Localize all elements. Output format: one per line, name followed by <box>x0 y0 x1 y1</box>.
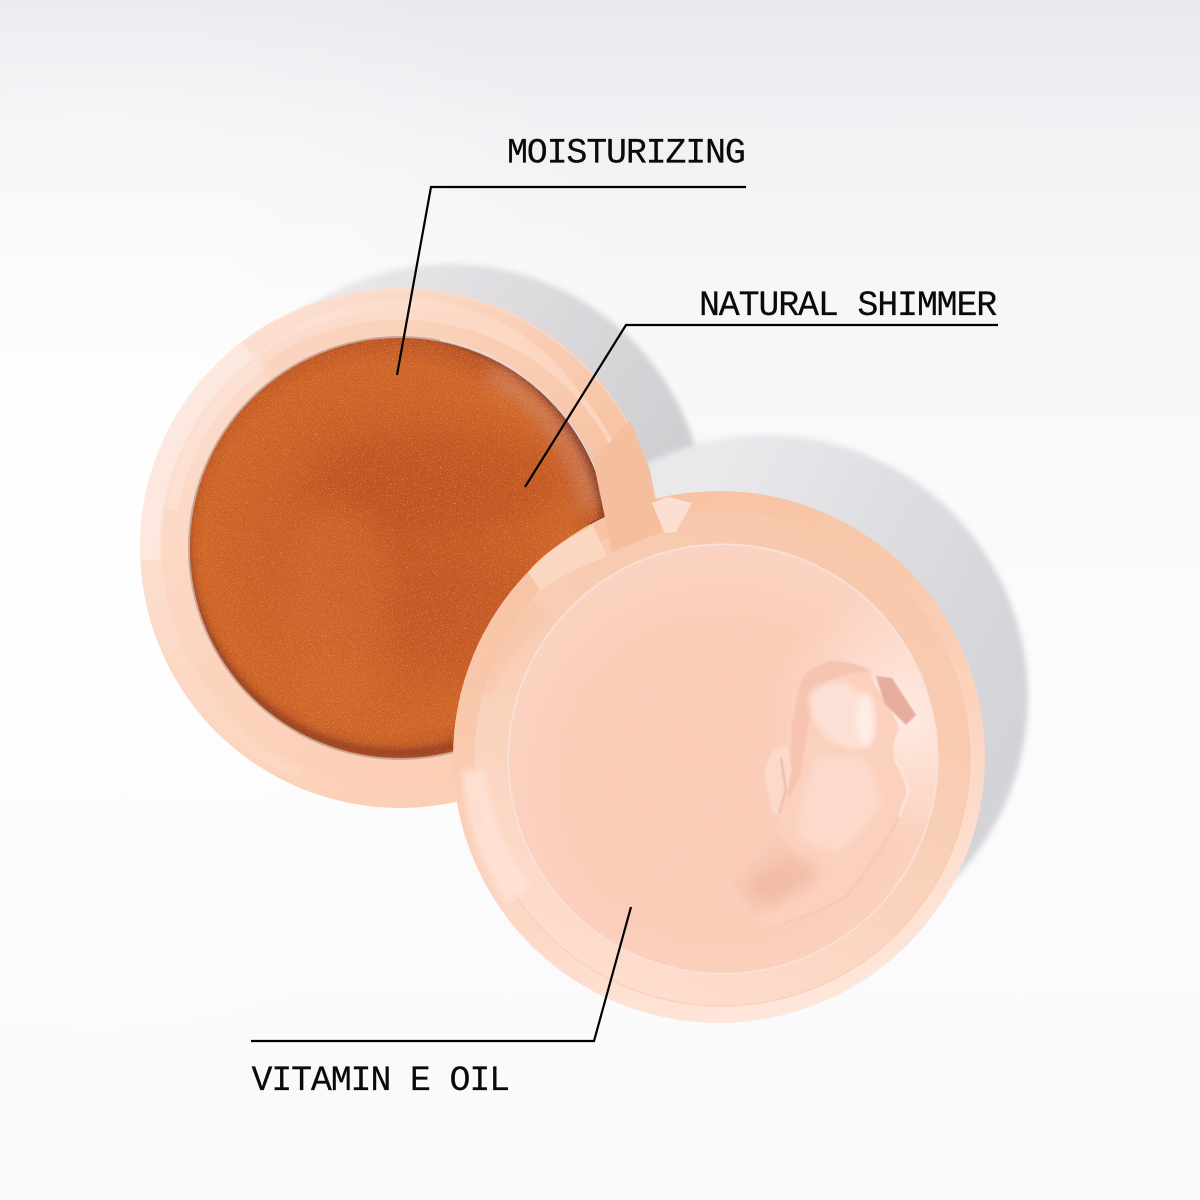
pan edge <box>188 336 612 760</box>
cream smear <box>729 661 916 924</box>
peach cream <box>509 545 937 973</box>
compact rim: right <box>453 491 985 1023</box>
dark pan sliver <box>590 515 611 553</box>
pan edge <box>508 544 938 974</box>
leader line <box>397 187 746 375</box>
shadow: left compact <box>194 264 706 776</box>
shadow: right compact <box>504 435 1028 959</box>
lock tab <box>528 525 607 590</box>
silver pan highlight <box>440 340 608 515</box>
leader line <box>525 325 998 487</box>
compact: peach highlighter <box>453 420 985 1023</box>
callout: vitamin e oil <box>251 907 631 1101</box>
bronze shimmer cream <box>186 329 610 758</box>
left compact rim visible through notch <box>593 420 662 552</box>
leader line <box>251 907 631 1041</box>
label: VITAMIN E OIL <box>252 1061 509 1101</box>
label: NATURAL SHIMMER <box>699 286 997 326</box>
callout: natural shimmer <box>525 286 998 487</box>
label: MOISTURIZING <box>507 134 745 174</box>
compact rim: left <box>140 288 660 808</box>
callout: moisturizing <box>397 134 746 375</box>
hinge tab <box>652 497 692 533</box>
compact: bronze shimmer <box>140 288 660 808</box>
